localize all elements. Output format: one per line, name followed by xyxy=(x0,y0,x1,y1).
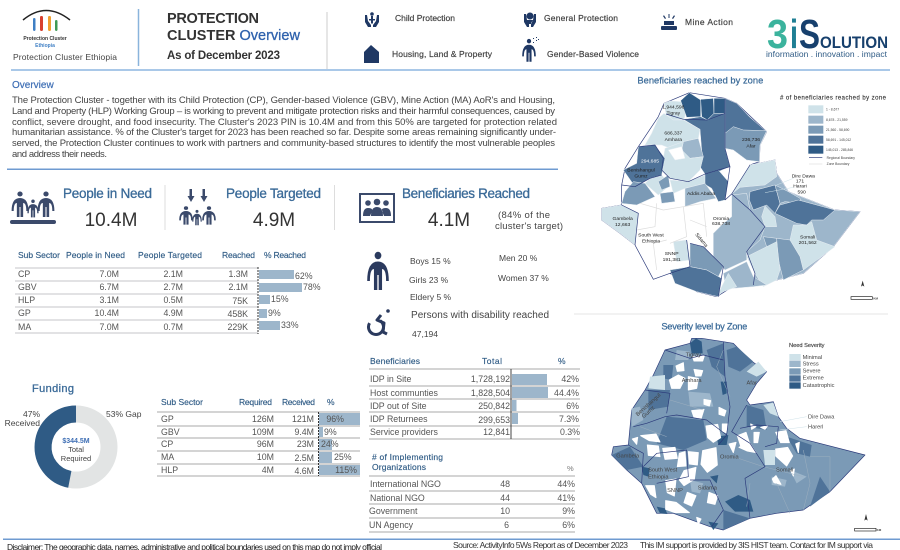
title xyxy=(167,11,300,62)
funding donut xyxy=(5,383,142,480)
footer: Source: ActivityInfo 5Ws Report as of December 2023 xyxy=(453,540,628,550)
logo: 3iSolution xyxy=(766,11,888,59)
table: implementing organizations: 10 xyxy=(500,506,510,516)
severity legend: Need Severity xyxy=(789,343,825,349)
icon: child protection xyxy=(365,12,379,27)
map labels: South West xyxy=(638,233,664,239)
table: people by sub sector: 229K xyxy=(227,322,248,332)
demographics: 47,194 xyxy=(412,329,438,339)
table: implementing organizations: 9% xyxy=(562,506,575,516)
map labels: Afar xyxy=(746,144,756,150)
sector labels: Mine Action xyxy=(685,17,733,27)
overview text block: Overview xyxy=(12,80,54,91)
map: severity level by zone xyxy=(612,322,882,532)
table: implementing organizations: 44 xyxy=(500,493,510,503)
table: beneficiaries: 7.3% xyxy=(559,414,579,424)
icon: wheelchair xyxy=(366,309,390,337)
table: implementing organizations: Government xyxy=(369,506,418,516)
overview text block xyxy=(12,80,557,160)
table: beneficiaries: IDP in Site xyxy=(370,374,412,384)
logo: 3iSolution: OLUTION xyxy=(820,34,888,52)
table: beneficiaries: Host communties xyxy=(370,388,439,398)
logo: 3iSolution: 3 xyxy=(767,11,788,57)
table: funding by sub sector: 4M xyxy=(262,465,274,475)
icon: gender-based violence xyxy=(522,37,539,62)
map labels: SNNP xyxy=(667,488,683,494)
table: funding by sub sector: 96M xyxy=(257,439,274,449)
table: people by sub sector: 7.0M xyxy=(99,322,119,332)
map labels: 1,944,596 xyxy=(662,104,685,110)
stat: people in need xyxy=(10,186,152,231)
map labels: Harerl xyxy=(808,424,823,430)
stat: people in need: 10.4M xyxy=(85,210,137,231)
map labels: 12,663 xyxy=(615,222,631,228)
demographics: Women 37 % xyxy=(498,273,549,283)
table: beneficiaries: 1,728,192 xyxy=(471,374,510,384)
table: people by sub sector: % Reached xyxy=(264,250,306,260)
table: funding by sub sector: CP xyxy=(161,439,173,449)
stat: beneficiaries reached: 4.1M xyxy=(428,210,470,231)
sector labels: Gender-Based Violence xyxy=(547,49,639,59)
table: people by sub sector: 62% xyxy=(295,271,313,281)
table: people by sub sector: MA xyxy=(18,322,31,332)
table: people by sub sector: 2.7M xyxy=(163,282,183,292)
table: funding by sub sector: 9.4M xyxy=(294,427,314,437)
logo: 3iSolution: i xyxy=(790,11,798,57)
table: people by sub sector: 15% xyxy=(271,294,289,304)
table: beneficiaries: 12,841 xyxy=(483,427,510,437)
icon: person xyxy=(367,252,389,290)
table: funding by sub sector: 25% xyxy=(334,452,352,462)
table: implementing organizations: 6% xyxy=(562,520,575,530)
table: people by sub sector: Sub Sector xyxy=(18,250,60,260)
table: beneficiaries: 250,842 xyxy=(478,401,510,411)
map legend: 145,013 - 285,846 xyxy=(826,148,853,152)
map labels: Amhara xyxy=(665,137,682,143)
table: people by sub sector: 0.5M xyxy=(163,295,183,305)
table: funding by sub sector: 109M xyxy=(252,427,274,437)
table: people by sub sector: 6.7M xyxy=(99,282,119,292)
map labels: 236,736 xyxy=(742,137,760,143)
map labels: Sidama xyxy=(693,232,709,249)
map labels: Somali xyxy=(800,234,815,240)
table: implementing organizations: 6 xyxy=(504,520,509,530)
table: people by sub sector: 2.1M xyxy=(228,282,248,292)
map legend: 58,691 - 145,012 xyxy=(826,138,851,142)
severity legend: Extreme xyxy=(803,376,824,382)
table: people by sub sector: 9% xyxy=(268,308,281,318)
funding donut: $344.5M xyxy=(62,438,90,445)
logo: 3iSolution: information . innovation . impact xyxy=(766,49,888,59)
table: beneficiaries: Total xyxy=(482,356,502,366)
demographics: Men 20 % xyxy=(499,253,538,263)
table: funding by sub sector: 115% xyxy=(335,465,357,475)
map: beneficiaries reached by zone: Beneficiaries reached by zone xyxy=(637,76,763,86)
table: people by sub sector: GP xyxy=(18,308,31,318)
table: funding by sub sector: 126M xyxy=(252,414,274,424)
stat: beneficiaries reached: cluster's target) xyxy=(495,221,563,232)
table: people by sub sector: 1.3M xyxy=(228,269,248,279)
icon: general protection xyxy=(524,12,536,27)
table: implementing organizations: National NGO xyxy=(370,493,425,503)
map labels: Sidama xyxy=(698,485,718,491)
table: implementing organizations: Organizations xyxy=(372,462,426,472)
table: people by sub sector: GBV xyxy=(18,282,37,292)
stat: people targeted: People Targeted xyxy=(226,186,321,201)
table: implementing organizations: 41% xyxy=(557,493,575,503)
table: funding by sub sector: Sub Sector xyxy=(161,397,203,407)
table: beneficiaries: 6% xyxy=(566,401,579,411)
table: people by sub sector: HLP xyxy=(18,295,35,305)
map labels: 201,562 xyxy=(799,240,817,246)
map labels: 171 xyxy=(796,178,804,184)
stat: beneficiaries reached: (84% of the xyxy=(498,210,550,221)
table: funding by sub sector: HLP xyxy=(161,465,178,475)
table: people by sub sector: 458K xyxy=(227,309,248,319)
map legend: 21,560 - 58,690 xyxy=(826,128,849,132)
bars: % reached xyxy=(259,270,302,330)
table: implementing organizations: International NGO xyxy=(370,479,441,489)
map labels: Addis Ababa xyxy=(687,191,715,197)
logo: Protection Cluster Ethiopia: Protection Cluster Ethiopia xyxy=(13,52,117,62)
severity zones: minimal and stress xyxy=(632,350,807,493)
overview text block: conflict, severe drought, and food insecurity. The Cluster's 2023 PIN is 10.4M and from this 50% are targeted for protection related xyxy=(12,117,557,128)
table: funding by sub sector: MA xyxy=(161,452,174,462)
title: PROTECTION xyxy=(167,11,259,27)
table: implementing organizations: # of Implementing xyxy=(372,452,443,462)
map: beneficiaries reached by zone xyxy=(602,76,887,300)
demographics: Girls 23 % xyxy=(409,275,449,285)
table: funding by sub sector: 4.6M xyxy=(294,466,314,476)
icon: people in need xyxy=(10,192,56,224)
map labels: Gumz xyxy=(634,174,648,180)
map legend: 1 - 8,677 xyxy=(826,108,839,112)
sector labels xyxy=(392,13,733,59)
map labels: Ethiopia xyxy=(642,239,660,245)
table: people by sub sector: 10.4M xyxy=(95,308,119,318)
sector icons legend xyxy=(364,12,677,63)
map: severity level by zone: Severity level by Zone xyxy=(661,322,747,332)
stat: beneficiaries reached: Beneficiaries Reached xyxy=(402,186,530,201)
table: beneficiaries xyxy=(369,356,580,439)
table: people by sub sector: 7.0M xyxy=(99,269,119,279)
map labels: Gumz xyxy=(641,405,656,420)
table: implementing organizations: % xyxy=(567,464,574,473)
table: funding by sub sector: 23M xyxy=(297,439,314,449)
map labels: 191,381 xyxy=(663,257,681,263)
table: funding by sub sector: 9% xyxy=(324,427,337,437)
map labels: Gambela xyxy=(616,453,640,459)
table: people by sub sector: Reached xyxy=(222,250,255,260)
stat: people targeted xyxy=(179,186,321,231)
map labels: Tigray xyxy=(666,110,681,116)
icon: mine action xyxy=(661,14,677,30)
sector labels: Housing, Land & Property xyxy=(392,49,493,59)
table: implementing organizations: 48 xyxy=(500,479,510,489)
stat: people in need: People in Need xyxy=(63,186,152,201)
title: CLUSTER Overview xyxy=(167,28,300,44)
table: people by sub sector: 4.9M xyxy=(163,308,183,318)
logo: Protection Cluster Ethiopia: Ethiopia xyxy=(35,43,55,49)
severity legend: Stress xyxy=(803,361,819,367)
severity legend: Severe xyxy=(803,369,821,375)
map labels: 686,337 xyxy=(664,130,683,136)
table: beneficiaries: % xyxy=(558,356,566,366)
title: As of December 2023 xyxy=(167,50,280,62)
funding donut: Required xyxy=(61,454,91,463)
table: beneficiaries: 42% xyxy=(561,374,579,384)
table: beneficiaries: IDP out of Site xyxy=(370,401,427,411)
footer xyxy=(7,540,873,550)
icon: people targeted xyxy=(179,189,216,225)
icon: beneficiaries xyxy=(360,194,394,222)
table: implementing organizations: UN Agency xyxy=(369,520,414,530)
table: beneficiaries: 299,653 xyxy=(478,415,510,425)
map labels: Gambela xyxy=(613,216,633,222)
table: beneficiaries: Beneficiaries xyxy=(370,356,420,366)
severity legend: Catastrophic xyxy=(803,383,835,389)
sector labels: General Protection xyxy=(544,13,618,23)
table: people by sub sector: 0.7M xyxy=(163,322,183,332)
table: funding by sub sector: % xyxy=(327,397,335,407)
overview text block: Land and Property (HLP) Working Group – is working to prevent and mitigate protection risks and their harmful consequences, caused by xyxy=(12,106,555,117)
table: funding by sub sector: Received xyxy=(282,397,315,407)
stat: beneficiaries reached xyxy=(360,186,563,232)
map labels xyxy=(616,353,835,494)
map labels: Benishangul xyxy=(627,168,655,174)
table: people by sub sector xyxy=(15,250,321,334)
severity legend xyxy=(789,343,835,389)
scale bar: KM xyxy=(873,296,878,300)
map labels: 294,685 xyxy=(641,159,659,165)
logo: 3iSolution: S xyxy=(799,11,820,57)
table: funding by sub sector: Required xyxy=(239,397,272,407)
map labels: Ethiopia xyxy=(648,475,669,481)
table: funding by sub sector xyxy=(157,397,360,476)
sector labels: Child Protection xyxy=(395,13,455,23)
map legend xyxy=(780,95,887,166)
severity zones: no data xyxy=(632,356,799,524)
demographics: Boys 15 % xyxy=(410,256,451,266)
table: funding by sub sector: 96% xyxy=(326,414,344,424)
logo: Protection Cluster Ethiopia xyxy=(13,10,117,62)
overview text block: served, the Protection Cluster continues to work with partners and community-based structures to identify the most vulnerable peoples xyxy=(12,138,555,149)
map labels: Oromia xyxy=(720,455,739,461)
map labels: Afar xyxy=(746,381,757,387)
funding donut: Funding xyxy=(32,383,74,395)
overview text block: The Protection Cluster - together with its Child Protection (CP), Gender-based Violence (GBV), Mine Action (MA) AoR's and Housing, xyxy=(12,95,555,106)
map labels: Amhara xyxy=(682,378,702,384)
overview text block: humanitarian assistance. % of the Cluster's target for 2023 has been reached so far. Despite some areas remaining significantly under- xyxy=(12,127,556,138)
funding donut: Total xyxy=(68,445,84,454)
map labels xyxy=(613,104,817,263)
map labels: Oromia xyxy=(713,216,729,222)
table: funding by sub sector: 10M xyxy=(257,452,274,462)
table: beneficiaries: 44.4% xyxy=(554,388,579,398)
map labels: Dire Dawa xyxy=(808,415,835,421)
overview text block: and address their needs. xyxy=(12,149,107,160)
table: beneficiaries: IDP Returnees xyxy=(370,414,428,424)
map labels: 638,738 xyxy=(712,221,730,227)
table: beneficiaries: 1,828,504 xyxy=(471,388,510,398)
table: people by sub sector: CP xyxy=(18,269,30,279)
map legend: # of beneficiaries reached by zone xyxy=(780,95,887,101)
map labels: Harari xyxy=(793,183,807,189)
demographics: Persons with disability reached xyxy=(411,310,549,321)
map labels: Benishangul xyxy=(635,393,662,418)
map labels: South West xyxy=(648,467,678,473)
map labels: Somali xyxy=(776,468,793,474)
scale bar xyxy=(851,281,878,300)
map labels: 590 xyxy=(798,189,806,195)
map legend: 8,678 - 21,559 xyxy=(826,118,848,122)
severity zones: extreme and catastrophic xyxy=(612,338,830,530)
funding donut: Received xyxy=(5,418,40,428)
map labels: SNNP xyxy=(665,251,679,257)
scale bar xyxy=(855,514,882,532)
severity legend: Minimal xyxy=(803,355,822,361)
table: people by sub sector: People Targeted xyxy=(138,250,202,260)
demographics xyxy=(366,252,549,339)
table: implementing organizations xyxy=(369,452,575,532)
table: funding by sub sector: GBV xyxy=(161,427,180,437)
map legend: Regional Boundary xyxy=(827,156,855,160)
map labels: Dire Dawa xyxy=(792,173,815,179)
table: people by sub sector: 75K xyxy=(232,296,248,306)
table: funding by sub sector: 121M xyxy=(292,414,314,424)
demographics: Eldery 5 % xyxy=(410,292,452,302)
funding donut: 47% xyxy=(23,409,40,419)
table: people by sub sector: 2.1M xyxy=(163,269,183,279)
stat: people targeted: 4.9M xyxy=(253,210,295,231)
funding donut: 53% Gap xyxy=(106,409,142,419)
map labels: Tigray xyxy=(686,353,701,359)
table: beneficiaries: 0.3% xyxy=(560,427,580,437)
table: people by sub sector: 33% xyxy=(281,320,299,330)
table: people by sub sector: 78% xyxy=(303,282,321,292)
logo: Protection Cluster Ethiopia: Protection Cluster xyxy=(23,36,67,42)
icon: house xyxy=(364,45,379,63)
table: people by sub sector: 3.1M xyxy=(99,295,119,305)
map legend: Zone Boundary xyxy=(827,162,850,166)
table: funding by sub sector: 24% xyxy=(321,439,339,449)
table: funding by sub sector: GP xyxy=(161,414,174,424)
scale bar: KM xyxy=(877,528,882,532)
table: beneficiaries: Service providers xyxy=(370,427,439,437)
table: funding by sub sector: 2.5M xyxy=(294,453,314,463)
footer: This IM support is provided by 3IS HIST team. Contact for IM support via xyxy=(640,540,873,550)
table: implementing organizations: 44% xyxy=(557,479,575,489)
table: people by sub sector: People in Need xyxy=(66,250,125,260)
